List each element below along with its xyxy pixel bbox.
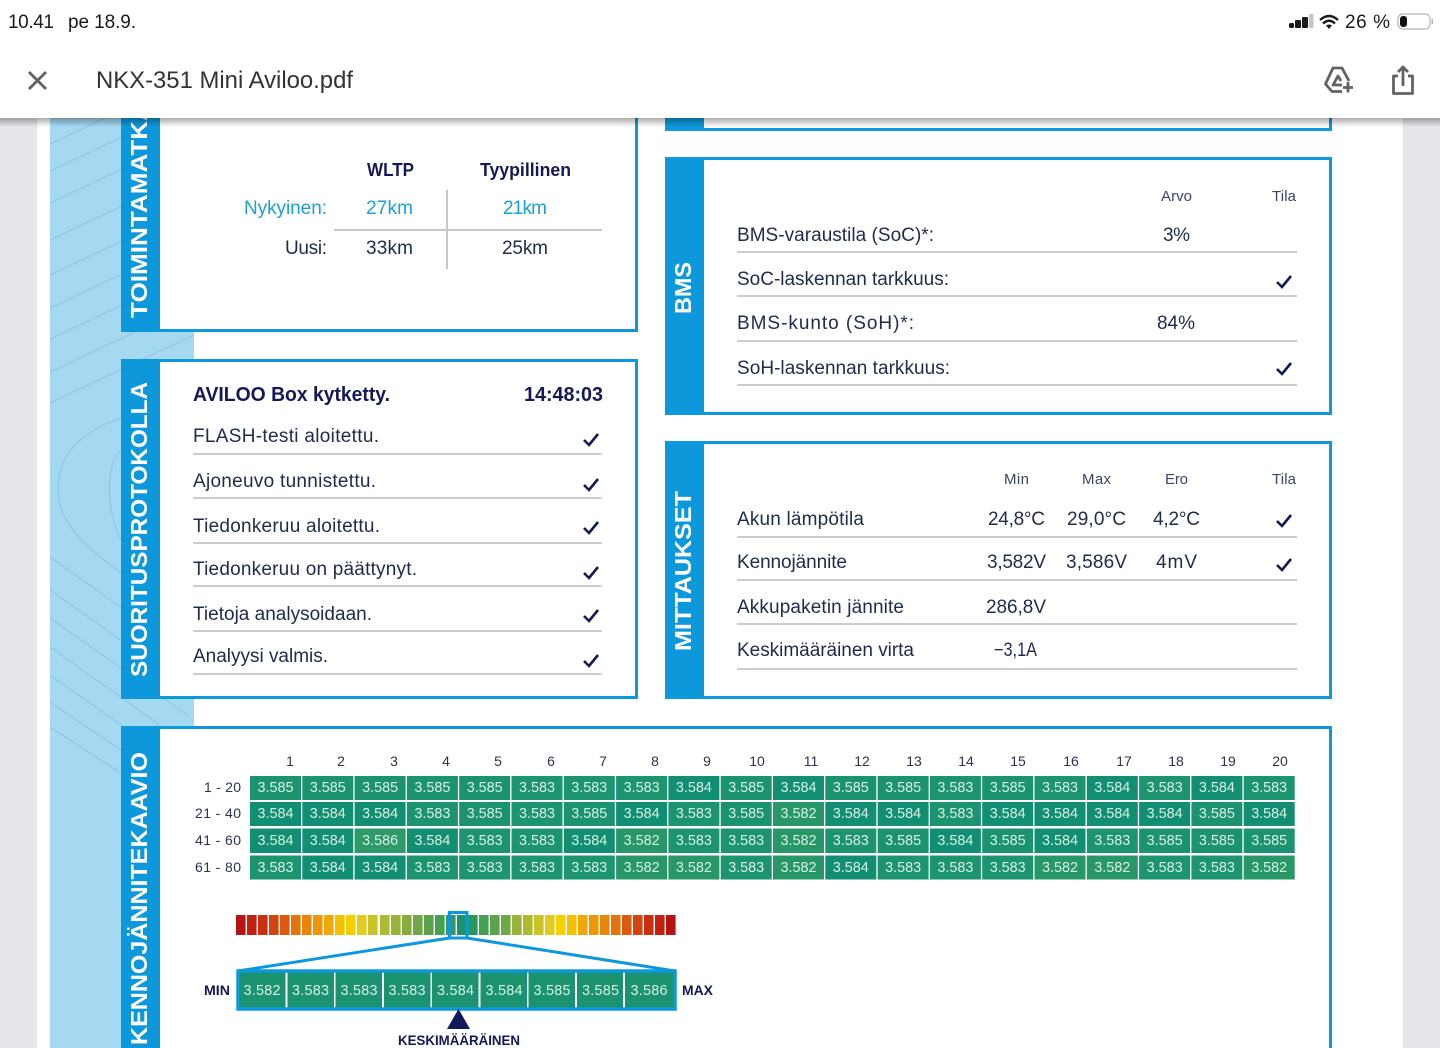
cell voltage row 1-20: 3.583 (624, 780, 660, 796)
cell voltage row 41-60: 3.585 (990, 833, 1026, 849)
zoomed cell values: 3.583 (292, 983, 329, 999)
protocol checklist: Tiedonkeruu on päättynyt. (193, 559, 417, 580)
measurements table: Tila (1272, 471, 1297, 488)
zoomed cell values: 3.584 (437, 983, 474, 999)
BMS table: 3% (1163, 225, 1190, 246)
cell voltage row 21-40: 3.583 (937, 806, 973, 822)
cell voltage row 41-60: 3.584 (414, 833, 450, 849)
mittaukset heading: MITTAUKSET (670, 491, 696, 651)
row labels: 21 - 40 (195, 805, 241, 821)
suoritusprotokolla heading: SUORITUSPROTOKOLLA (126, 382, 152, 677)
cell voltage row 41-60: 3.586 (362, 833, 398, 849)
cell voltage row 1-20: 3.585 (833, 780, 869, 796)
measurements table: 286,8V (986, 597, 1046, 618)
cell voltage row 61-80: 3.583 (519, 860, 555, 876)
measurements table: 29,0°C (1067, 509, 1126, 530)
cell voltage row 1-20: 3.585 (310, 780, 346, 796)
cell voltage row 61-80: 3.583 (885, 860, 921, 876)
cell voltage row 1-20: 3.583 (519, 780, 555, 796)
icon: close (29, 72, 46, 89)
cell voltage row 1-20: 3.585 (414, 780, 450, 796)
range table: Uusi: (285, 238, 327, 259)
document title: NKX-351 Mini Aviloo.pdf (96, 67, 353, 94)
protocol checklist: FLASH-testi aloitettu. (193, 426, 379, 447)
column numbers: 19 (1220, 753, 1236, 769)
kennojännitekaavio sidebar (121, 726, 160, 1048)
zoomed cell values: 3.584 (486, 983, 522, 999)
cell voltage row 21-40: 3.584 (258, 806, 294, 822)
mittaukset sidebar (665, 441, 704, 699)
cell voltage row 1-20: 3.585 (362, 780, 398, 796)
range table: 25km (502, 238, 548, 259)
measurements table: 4,2°C (1153, 509, 1200, 530)
BMS sidebar (665, 157, 704, 415)
range table: 33km (366, 238, 413, 259)
icon: share (1394, 67, 1412, 94)
panel: BMS (665, 157, 1330, 415)
cell voltage row 1-20: 3.585 (467, 780, 503, 796)
range table: 21km (503, 198, 547, 219)
cell voltage row 61-80: 3.582 (1042, 860, 1078, 876)
cell voltage row 21-40: 3.584 (885, 806, 921, 822)
cell voltage row 41-60: 3.585 (1199, 833, 1235, 849)
range table: WLTP (367, 160, 414, 180)
cell voltage row 1-20: 3.584 (676, 780, 712, 796)
background band (50, 76, 194, 1048)
cell voltage row 41-60: 3.583 (833, 833, 869, 849)
battery percentage: 26 % (1345, 12, 1390, 33)
zoomed cell values: 3.583 (388, 983, 426, 999)
suoritusprotokolla sidebar (121, 359, 160, 699)
column numbers: 16 (1063, 753, 1079, 769)
cell voltage row 41-60: 3.585 (1147, 833, 1183, 849)
zoomed cell values (238, 971, 675, 1009)
icon: add to drive (1326, 68, 1353, 92)
MIN label: MIN (204, 982, 230, 998)
icon: signal (1289, 14, 1314, 28)
zoomed cell values: 3.582 (244, 983, 280, 999)
cell voltage row 61-80: 3.584 (833, 860, 869, 876)
panel: suoritusprotokolla (121, 359, 636, 699)
cell voltage row 41-60: 3.585 (885, 833, 921, 849)
cell voltage row 41-60: 3.583 (519, 833, 555, 849)
measurements table: 3,582V (987, 552, 1046, 573)
cell voltage row 21-40: 3.583 (414, 806, 450, 822)
cell voltage row 41-60: 3.585 (1251, 833, 1287, 849)
cell voltage row 61-80 (250, 856, 1295, 880)
cell voltage row 21-40: 3.584 (990, 806, 1026, 822)
cell voltage row 61-80: 3.582 (676, 860, 712, 876)
cell voltage row 41-60: 3.583 (676, 833, 712, 849)
cell voltage row 41-60: 3.583 (467, 833, 503, 849)
panel: mittaukset (665, 441, 1330, 699)
column numbers: 11 (804, 753, 818, 769)
BMS table: Tila (1272, 188, 1297, 205)
column numbers: 17 (1116, 753, 1132, 769)
column numbers: 2 (337, 753, 345, 769)
cell voltage row 41-60: 3.584 (1042, 833, 1078, 849)
column numbers: 13 (906, 753, 922, 769)
cell voltage row 21-40: 3.584 (1042, 806, 1078, 822)
column numbers: 14 (958, 753, 974, 769)
panel: toimintamatka (121, 90, 636, 332)
measurements table: Ero (1165, 471, 1188, 488)
measurements table: 4mV (1156, 552, 1197, 573)
cell voltage row 1-20 (250, 776, 1295, 800)
BMS heading: BMS (670, 262, 696, 314)
header shadow (0, 118, 1440, 127)
range table: Tyypillinen (480, 160, 571, 180)
cell voltage row 1-20: 3.585 (885, 780, 921, 796)
protocol checklist: 14:48:03 (524, 384, 603, 406)
column numbers: 10 (749, 753, 765, 769)
icon: battery (1398, 14, 1433, 29)
cell voltage row 41-60: 3.584 (937, 833, 973, 849)
cell voltage row 61-80: 3.582 (1251, 860, 1287, 876)
cell voltage row 1-20: 3.583 (1147, 780, 1183, 796)
cell voltage row 1-20: 3.585 (728, 780, 764, 796)
column numbers: 8 (651, 753, 659, 769)
cell voltage row 61-80: 3.582 (1094, 860, 1130, 876)
zoomed cell values: 3.583 (340, 983, 378, 999)
zoom callout connector (238, 912, 675, 971)
cell voltage row 1-20: 3.585 (990, 780, 1026, 796)
cell voltage row 61-80: 3.583 (1199, 860, 1235, 876)
cell voltage row 21-40: 3.585 (1199, 806, 1235, 822)
cell voltage row 61-80: 3.583 (937, 860, 973, 876)
cell voltage row 61-80: 3.583 (1147, 860, 1183, 876)
measurements table: Max (1082, 471, 1112, 488)
column numbers: 7 (599, 753, 607, 769)
row labels: 61 - 80 (195, 859, 241, 875)
cell voltage row 21-40: 3.584 (310, 806, 346, 822)
cell voltage row 21-40: 3.582 (780, 806, 816, 822)
cell voltage row 61-80: 3.583 (258, 860, 294, 876)
cell voltage row 41-60: 3.582 (780, 833, 816, 849)
protocol checklist: AVILOO Box kytketty. (193, 384, 390, 406)
column numbers: 6 (547, 753, 555, 769)
cell voltage row 1-20: 3.584 (780, 780, 816, 796)
cell voltage row 21-40: 3.584 (362, 806, 398, 822)
protocol checklist: Analyysi valmis. (193, 646, 328, 667)
measurements table: Keskimääräinen virta (737, 640, 914, 661)
zoomed cell values: 3.585 (582, 983, 619, 999)
cell voltage row 21-40: 3.584 (1251, 806, 1287, 822)
row labels: 1 - 20 (204, 779, 241, 795)
cell voltage row 41-60: 3.584 (571, 833, 607, 849)
BMS table: BMS-varaustila (SoC)*: (737, 225, 934, 246)
range table: Nykyinen: (244, 198, 327, 219)
cell voltage row 1-20: 3.583 (1251, 780, 1287, 796)
cell voltage row 61-80: 3.584 (362, 860, 398, 876)
column numbers (286, 753, 1288, 769)
cell voltage row 1-20: 3.583 (1042, 780, 1078, 796)
cell voltage row 1-20: 3.585 (258, 780, 294, 796)
cell voltage row 1-20: 3.584 (1094, 780, 1130, 796)
cell voltage row 61-80: 3.583 (571, 860, 607, 876)
cell voltage row 21-40: 3.585 (467, 806, 503, 822)
column numbers: 4 (442, 753, 450, 769)
protocol checklist (193, 384, 603, 674)
icon: wifi (1320, 16, 1338, 29)
cell voltage row 61-80: 3.583 (728, 860, 764, 876)
panel: top right stub (665, 90, 1330, 131)
measurements table: −3,1A (994, 640, 1037, 661)
protocol checklist: Tiedonkeruu aloitettu. (193, 516, 380, 537)
cell voltage row 61-80: 3.583 (990, 860, 1026, 876)
column numbers: 20 (1272, 753, 1288, 769)
cell voltage row 61-80: 3.584 (310, 860, 346, 876)
cell voltage row 61-80: 3.583 (467, 860, 503, 876)
cell voltage row 61-80: 3.582 (624, 860, 660, 876)
cell voltage row 41-60 (250, 828, 1295, 853)
row labels: 41 - 60 (195, 832, 241, 848)
column numbers: 15 (1010, 753, 1026, 769)
cell voltage row 21-40: 3.584 (624, 806, 660, 822)
cell voltage row 41-60: 3.584 (310, 833, 346, 849)
BMS table: BMS-kunto (SoH)*: (737, 313, 914, 334)
cell voltage row 41-60: 3.584 (258, 833, 294, 849)
measurements table: 24,8°C (988, 509, 1045, 530)
status bar time: 10.41 (8, 12, 54, 33)
MAX label: MAX (682, 982, 714, 998)
measurements table: Kennojännite (737, 552, 847, 573)
zoomed cell values: 3.586 (630, 983, 668, 999)
BMS table: SoC-laskennan tarkkuus: (737, 269, 949, 290)
measurements table: 3,586V (1066, 552, 1127, 573)
range table (244, 160, 602, 269)
protocol checklist: Tietoja analysoidaan. (193, 604, 372, 625)
cell voltage row 1-20: 3.583 (937, 780, 973, 796)
colour scale strip (236, 915, 676, 935)
BMS table: Arvo (1161, 188, 1192, 205)
measurements table (737, 471, 1297, 669)
cell voltage row 21-40: 3.584 (833, 806, 869, 822)
average marker (447, 1009, 470, 1029)
app header (0, 0, 1440, 118)
cell voltage row 41-60: 3.583 (728, 833, 764, 849)
cell voltage row 21-40: 3.584 (1147, 806, 1183, 822)
range table: 27km (366, 198, 413, 219)
status bar date: pe 18.9. (68, 12, 136, 33)
cell voltage row 21-40: 3.583 (676, 806, 712, 822)
cell voltage row 21-40 (250, 802, 1295, 826)
column numbers: 18 (1168, 753, 1184, 769)
column numbers: 3 (390, 753, 398, 769)
zoomed cell values: 3.585 (534, 983, 570, 999)
toimintamatka sidebar (121, 90, 160, 332)
measurements table: Akkupaketin jännite (737, 597, 904, 618)
cell voltage row 21-40: 3.583 (519, 806, 555, 822)
column numbers: 9 (703, 753, 711, 769)
BMS table: 84% (1157, 313, 1195, 334)
toimintamatka heading: TOIMINTAMATKA (126, 102, 152, 318)
column numbers: 12 (854, 753, 870, 769)
row labels (195, 779, 241, 875)
BMS table: SoH-laskennan tarkkuus: (737, 358, 950, 379)
cell voltage row 61-80: 3.582 (780, 860, 816, 876)
cell voltage row 61-80: 3.583 (414, 860, 450, 876)
kennojännitekaavio heading: KENNOJÄNNITEKAAVIO (126, 752, 152, 1045)
BMS table (737, 188, 1297, 385)
measurements table: Akun lämpötila (737, 509, 864, 530)
protocol checklist: Ajoneuvo tunnistettu. (193, 471, 376, 492)
cell voltage row 41-60: 3.582 (624, 833, 660, 849)
column numbers: 1 (286, 753, 294, 769)
cell voltage row 21-40: 3.585 (728, 806, 764, 822)
cell voltage row 1-20: 3.584 (1199, 780, 1235, 796)
measurements table: Min (1004, 471, 1029, 488)
cell voltage row 1-20: 3.583 (571, 780, 607, 796)
panel: kennojännitekaavio (121, 726, 1330, 1048)
cell voltage row 21-40: 3.585 (571, 806, 607, 822)
cell voltage row 21-40: 3.584 (1094, 806, 1130, 822)
KESKIMÄÄRÄINEN label: KESKIMÄÄRÄINEN (398, 1032, 520, 1048)
cell voltage row 41-60: 3.583 (1094, 833, 1130, 849)
column numbers: 5 (494, 753, 502, 769)
